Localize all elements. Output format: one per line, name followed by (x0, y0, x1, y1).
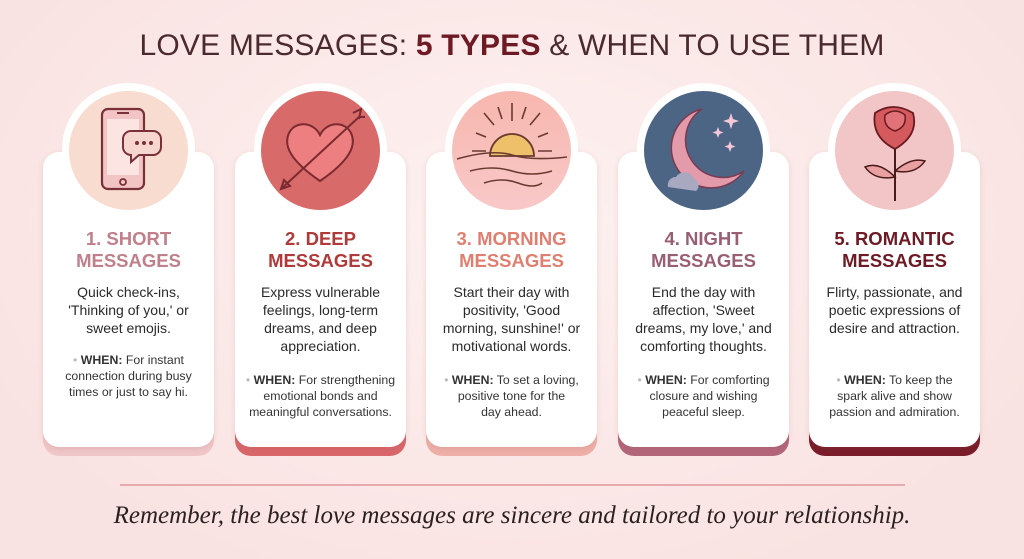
description: feelings, long-term (263, 302, 378, 318)
description: Quick check-ins, (77, 284, 180, 300)
heading: MESSAGES (76, 250, 181, 271)
icon: sunrise (452, 91, 571, 210)
heading: 3. MORNING (456, 228, 566, 249)
when note: connection during busy (65, 369, 192, 383)
description (68, 284, 189, 336)
description (443, 284, 580, 354)
description: End the day with (652, 284, 755, 300)
when note: positive tone for the (458, 389, 565, 403)
description: Express vulnerable (261, 284, 380, 300)
when note: emotional bonds and (263, 389, 378, 403)
when note: • WHEN: To keep the (836, 373, 953, 387)
heading (76, 228, 181, 271)
heading (268, 228, 373, 271)
when note: times or just to say hi. (69, 385, 188, 399)
when note (246, 373, 395, 419)
when note: passion and admiration. (829, 405, 960, 419)
heading (834, 228, 955, 271)
heading: 1. SHORT (86, 228, 171, 249)
description: dreams, and deep (264, 320, 377, 336)
panel: short messages (42, 83, 215, 456)
heading: 4. NIGHT (664, 228, 743, 249)
heading: MESSAGES (268, 250, 373, 271)
when note: peaceful sleep. (662, 405, 745, 419)
description: positivity, 'Good (463, 302, 560, 318)
panel: romantic messages (808, 83, 981, 456)
description: dreams, my love,' and (635, 320, 772, 336)
description: desire and attraction. (829, 320, 960, 336)
description: Start their day with (454, 284, 569, 300)
when note (444, 373, 579, 419)
icon: phone with chat bubble (69, 91, 188, 210)
when note: • WHEN: To set a loving, (444, 373, 579, 387)
heading: MESSAGES (842, 250, 947, 271)
icon: heart with arrow (261, 91, 380, 210)
description: poetic expressions of (829, 302, 960, 318)
when note (829, 373, 960, 419)
panel: morning messages (424, 83, 598, 456)
heading (456, 228, 566, 271)
when note: • WHEN: For comforting (637, 373, 770, 387)
title: LOVE MESSAGES: 5 TYPES & WHEN TO USE THEM (139, 29, 885, 62)
description: sweet emojis. (86, 320, 171, 336)
description (261, 284, 380, 354)
when note (65, 353, 192, 399)
footer text: Remember, the best love messages are sincere and tailored to your relationship. (114, 502, 910, 529)
description: appreciation. (280, 338, 361, 354)
heading: 2. DEEP (285, 228, 356, 249)
icon: rose (835, 91, 954, 210)
description: motivational words. (452, 338, 571, 354)
description: morning, sunshine!' or (443, 320, 580, 336)
icon: moon and stars (644, 91, 763, 210)
description: 'Thinking of you,' or (68, 302, 189, 318)
when note: meaningful conversations. (249, 405, 392, 419)
panel: night messages (616, 83, 790, 456)
when note: closure and wishing (649, 389, 758, 403)
description (635, 284, 772, 354)
when note: • WHEN: For strengthening (246, 373, 395, 387)
when note (637, 373, 770, 419)
heading: MESSAGES (651, 250, 756, 271)
when note: day ahead. (481, 405, 542, 419)
when note: spark alive and show (837, 389, 952, 403)
description (827, 284, 962, 336)
heading: MESSAGES (459, 250, 564, 271)
heading (651, 228, 756, 271)
when note: • WHEN: For instant (73, 353, 184, 367)
panel: deep messages (234, 83, 408, 456)
description: Flirty, passionate, and (827, 284, 962, 300)
heading: 5. ROMANTIC (834, 228, 955, 249)
description: affection, 'Sweet (652, 302, 755, 318)
description: comforting thoughts. (640, 338, 767, 354)
